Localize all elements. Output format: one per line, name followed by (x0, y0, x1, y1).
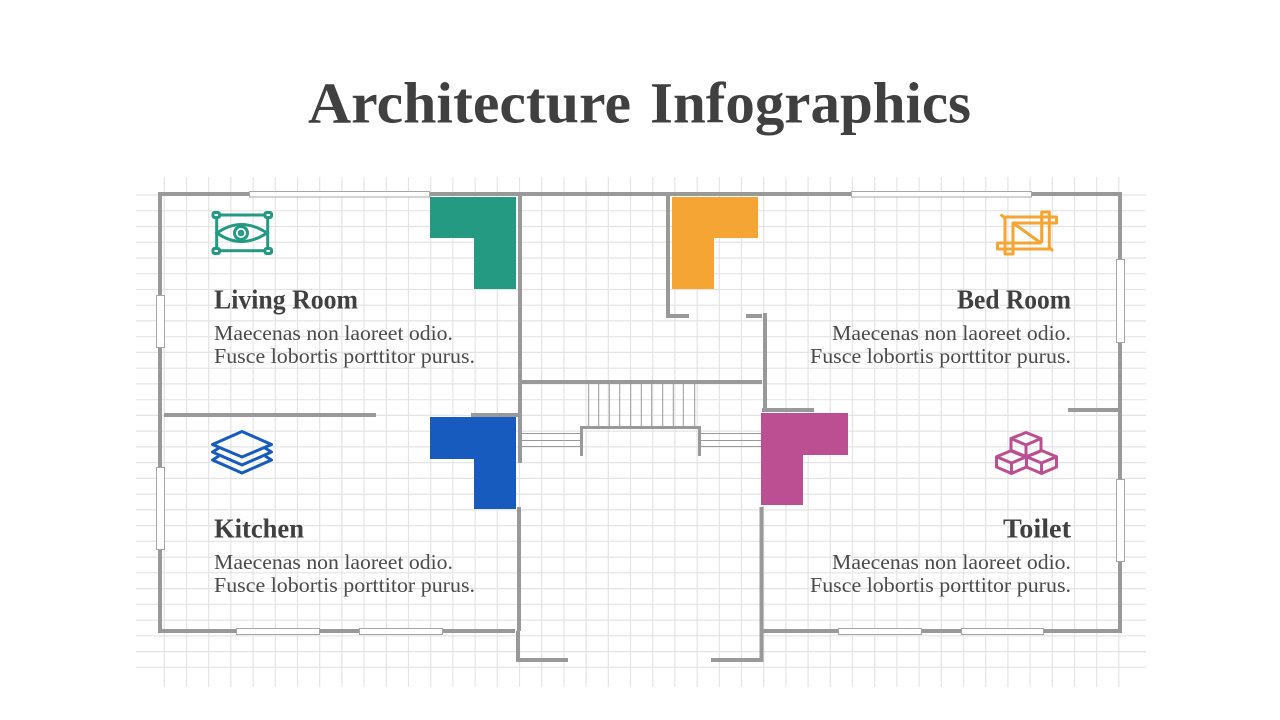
text: kitchen description: Maecenas non laoreet odio. (214, 550, 453, 574)
panel: living room (213, 197, 516, 368)
L-shaped marker: toilet (761, 413, 848, 505)
heading: bed room: Bed Room (957, 284, 1071, 314)
text: living room description: Maecenas non laoreet odio. (214, 321, 453, 345)
panel: kitchen (212, 417, 516, 597)
staircase (522, 384, 761, 456)
icon: stacked layers (212, 432, 272, 473)
title: Architecture (308, 70, 631, 136)
icon: drafting frame (998, 212, 1056, 254)
title (308, 70, 971, 136)
floor plan walls (160, 194, 1120, 660)
text: kitchen description (214, 550, 475, 597)
title: Infographics (650, 70, 971, 136)
panel: bed room (672, 197, 1071, 368)
text: toilet description: Maecenas non laoreet odio. (832, 550, 1071, 574)
L-shaped marker: kitchen (430, 417, 516, 509)
icon: cubes (996, 432, 1056, 474)
text: bed room description (810, 321, 1071, 368)
text: living room description (214, 321, 475, 368)
text: toilet description: Fusce lobortis porttitor purus. (810, 573, 1071, 597)
text: bed room description: Maecenas non laoreet odio. (832, 321, 1071, 345)
L-shaped marker: living room (430, 197, 516, 289)
heading: kitchen: Kitchen (214, 514, 304, 544)
text: bed room description: Fusce lobortis porttitor purus. (810, 344, 1071, 368)
heading: living room: Living Room (214, 284, 358, 314)
L-shaped marker: bed room (672, 197, 758, 289)
windows (156, 192, 1124, 634)
heading: toilet: Toilet (1003, 514, 1071, 544)
panel: toilet (761, 413, 1071, 597)
text: toilet description (810, 550, 1071, 597)
icon: eye in frame (213, 212, 272, 254)
text: living room description: Fusce lobortis porttitor purus. (214, 344, 475, 368)
text: kitchen description: Fusce lobortis porttitor purus. (214, 573, 475, 597)
